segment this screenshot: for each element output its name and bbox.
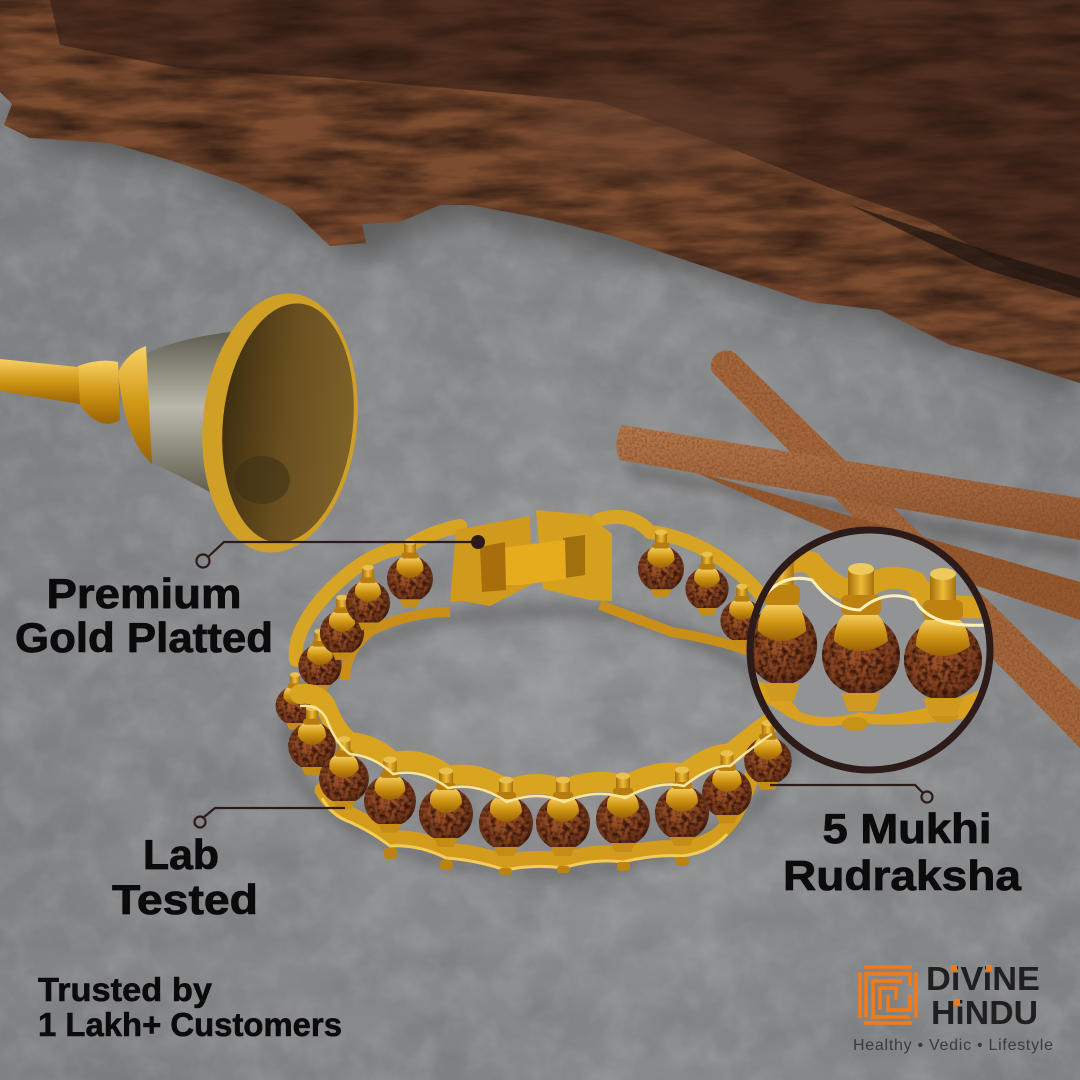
incense stick front (616, 425, 1080, 540)
callout: gold plated label (15, 570, 273, 661)
upper wave band (300, 694, 772, 790)
callout: lab tested line (194, 808, 345, 828)
brand name: DiViNE (926, 960, 1040, 997)
brand name: HiNDU (931, 994, 1038, 1031)
incense sticks (616, 350, 1080, 748)
brand name (926, 960, 1040, 1031)
back left beads (276, 539, 433, 729)
callout: lab tested label (112, 831, 258, 923)
back lower band (345, 605, 752, 680)
callout: gold plated line (196, 535, 485, 568)
callout: gold plated label: Premium (46, 570, 242, 617)
bell handle (0, 359, 80, 404)
lower band (322, 775, 752, 862)
trust statement: 1 Lakh+ Customers (38, 1006, 342, 1043)
clasp (450, 510, 612, 606)
incense stick lower (690, 470, 1080, 620)
magnifier lens (747, 530, 990, 770)
bark shadow (0, 100, 1080, 395)
zoomed bracelet detail (747, 553, 985, 731)
upper band highlight (300, 706, 772, 802)
callout: lab tested label: Lab (143, 831, 219, 878)
stick shadows (620, 463, 1080, 560)
tagline: Healthy • Vedic • Lifestyle (853, 1037, 1053, 1054)
lens ring (750, 530, 990, 770)
back right beads (638, 529, 764, 647)
icon: orange maze mark (860, 967, 916, 1023)
lower posts (384, 848, 689, 875)
callout: lab tested label: Tested (112, 876, 258, 923)
callout: rudraksha label: 5 Mukhi (822, 805, 992, 852)
trust statement: Trusted by (38, 971, 213, 1008)
logo (853, 960, 1053, 1054)
callout: rudraksha label: Rudraksha (783, 852, 1022, 899)
trust statement (38, 971, 342, 1043)
bell rim (190, 286, 370, 560)
incense stick back diagonal (711, 350, 1080, 748)
bell silver cone (118, 332, 245, 512)
bell snuffer (0, 286, 370, 560)
back upper band (296, 517, 765, 660)
callout: rudraksha label (783, 805, 1022, 899)
bracelet shadow (290, 610, 790, 870)
front rudraksha beads (288, 705, 792, 856)
orange letter dots (951, 965, 992, 1005)
wood bark piece (0, 0, 1080, 383)
callout: rudraksha line (770, 785, 932, 802)
callout: gold plated label: Gold Platted (15, 614, 273, 661)
bracelet (276, 510, 792, 875)
